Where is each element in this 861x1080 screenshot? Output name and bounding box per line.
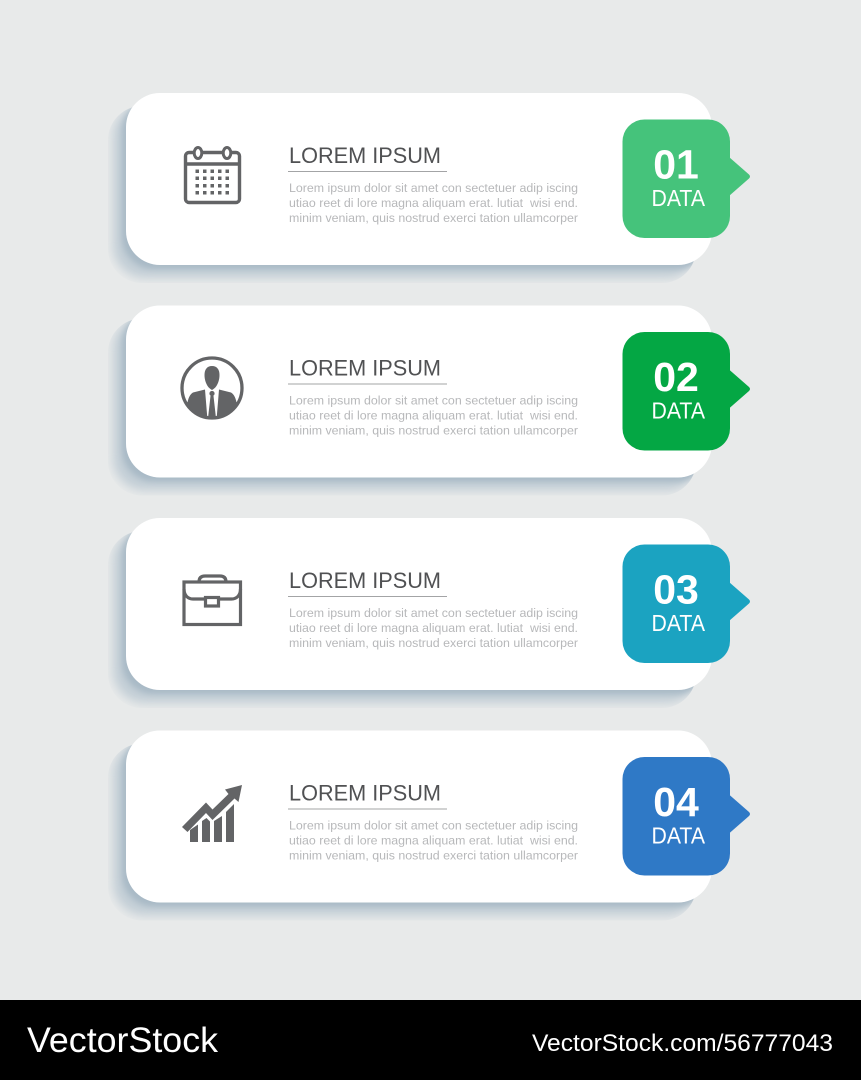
footer logo: VectorStock bbox=[27, 1021, 219, 1060]
badge 03: 03 bbox=[653, 566, 699, 612]
badge 01: 01 bbox=[653, 142, 699, 188]
footer bar bbox=[0, 1000, 861, 1080]
badge 02: DATA bbox=[652, 398, 706, 424]
badge 01 bbox=[622, 120, 750, 238]
panel: row 4 bbox=[113, 730, 750, 916]
card 4 bbox=[126, 730, 712, 902]
text block 1: minim veniam, quis nostrud exerci tation ullamcorper bbox=[289, 211, 578, 225]
panel: row 3 bbox=[113, 518, 750, 703]
text block 2: utiao reet di lore magna aliquam erat. lutiat wisi end. bbox=[289, 408, 578, 422]
icon: calendar bbox=[185, 148, 240, 202]
card 2 bbox=[126, 306, 712, 478]
text block 4: Lorem ipsum dolor sit amet con sectetuer adip iscing bbox=[289, 818, 578, 832]
icon: briefcase bbox=[184, 576, 240, 624]
text block 3 bbox=[289, 606, 578, 650]
card 1 bbox=[126, 93, 712, 265]
heading 2: LOREM IPSUM bbox=[289, 356, 441, 380]
footer url: VectorStock.com/56777043 bbox=[532, 1030, 833, 1057]
text block 1 bbox=[289, 181, 578, 225]
heading 1: LOREM IPSUM bbox=[289, 143, 441, 168]
text block 4: minim veniam, quis nostrud exerci tation ullamcorper bbox=[289, 848, 578, 862]
text block 3: utiao reet di lore magna aliquam erat. lutiat wisi end. bbox=[289, 621, 578, 635]
text block 4 bbox=[289, 818, 578, 862]
badge 01: DATA bbox=[652, 185, 706, 211]
panel: row 1 bbox=[113, 93, 750, 278]
badge 02 bbox=[622, 332, 750, 450]
heading 4: LOREM IPSUM bbox=[289, 780, 441, 806]
text block 4: utiao reet di lore magna aliquam erat. lutiat wisi end. bbox=[289, 834, 578, 848]
card 3 bbox=[126, 518, 712, 690]
panel: row 2 bbox=[113, 306, 750, 490]
text block 2 bbox=[289, 394, 578, 438]
badge 02: 02 bbox=[653, 354, 699, 400]
text block 2: Lorem ipsum dolor sit amet con sectetuer adip iscing bbox=[289, 394, 578, 408]
icon: businessman bbox=[182, 358, 242, 420]
badge 04 bbox=[622, 757, 750, 876]
text block 3: minim veniam, quis nostrud exerci tation ullamcorper bbox=[289, 636, 578, 650]
text block 1: Lorem ipsum dolor sit amet con sectetuer adip iscing bbox=[289, 181, 578, 195]
badge 04: 04 bbox=[653, 779, 699, 825]
badge 03 bbox=[622, 544, 750, 663]
text block 3: Lorem ipsum dolor sit amet con sectetuer adip iscing bbox=[289, 606, 578, 620]
text block 2: minim veniam, quis nostrud exerci tation ullamcorper bbox=[289, 424, 578, 438]
icon: growth chart bbox=[182, 785, 242, 842]
text block 1: utiao reet di lore magna aliquam erat. lutiat wisi end. bbox=[289, 196, 578, 210]
badge 04: DATA bbox=[652, 822, 706, 848]
heading 3: LOREM IPSUM bbox=[289, 568, 441, 593]
badge 03: DATA bbox=[652, 610, 706, 636]
